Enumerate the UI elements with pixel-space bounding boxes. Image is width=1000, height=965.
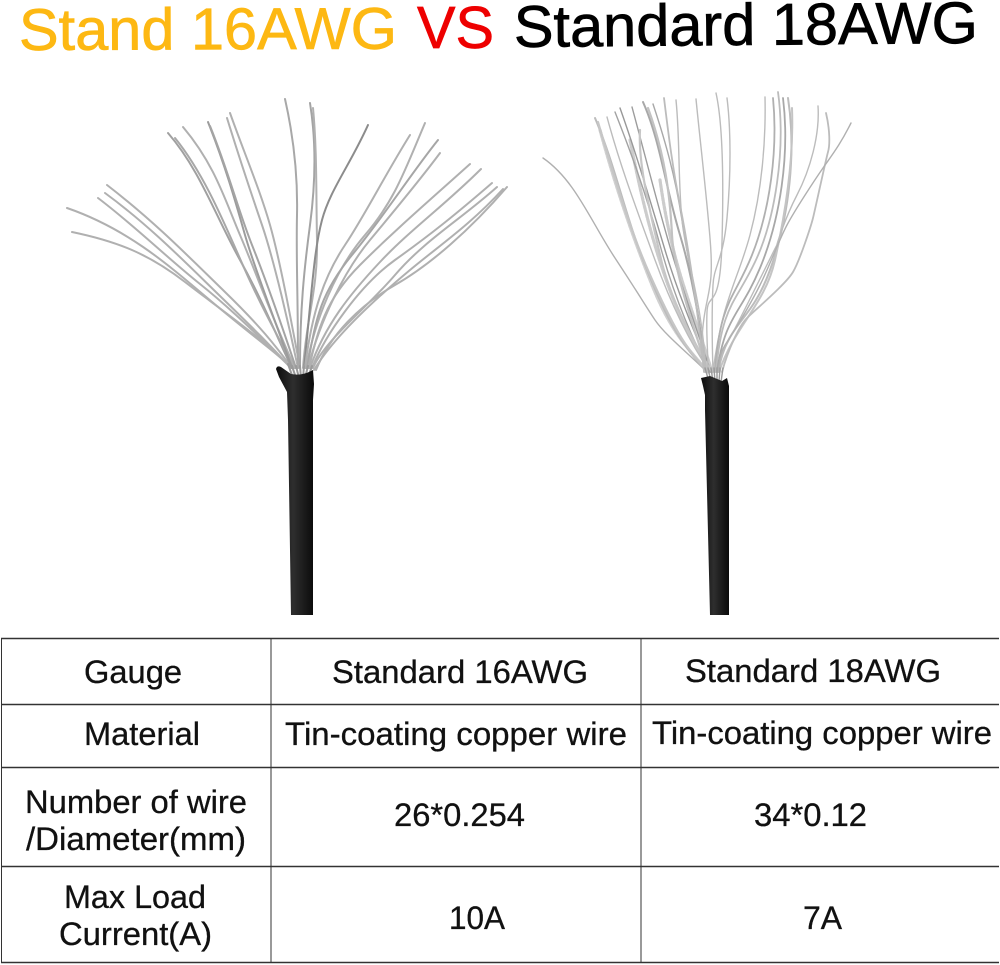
16AWG wire photo illustration: [67, 99, 507, 615]
row: number of wire and diameter: [25, 784, 867, 857]
16AWG stripped strands: [67, 99, 507, 378]
row: max load current: 10A: [449, 900, 506, 936]
row: gauge: Gauge: [84, 654, 182, 690]
row: gauge: Standard 18AWG: [685, 653, 941, 689]
row: number of wire and diameter: Number of wire: [25, 784, 247, 820]
18AWG stripped strands: [543, 92, 851, 382]
row: material: Material: [84, 716, 200, 752]
row: material: [84, 715, 992, 752]
row: material: Tin-coating copper wire: [285, 716, 627, 752]
table grid: [1, 638, 999, 963]
row: gauge: [84, 653, 941, 690]
comparison table: [1, 638, 999, 963]
title: [19, 0, 978, 63]
row: max load current: Max Load: [64, 879, 206, 915]
row: gauge: Standard 16AWG: [332, 654, 588, 690]
row: max load current: Current(A): [59, 916, 212, 952]
row: material: Tin-coating copper wire: [652, 715, 992, 751]
18AWG wire photo illustration: [543, 92, 851, 615]
row: number of wire and diameter: 26*0.254: [394, 797, 525, 833]
18AWG black cable: [701, 376, 729, 615]
row: max load current: [59, 879, 843, 952]
16AWG black cable: [276, 366, 314, 615]
row: number of wire and diameter: /Diameter(mm): [26, 821, 246, 857]
row: number of wire and diameter: 34*0.12: [754, 797, 867, 833]
row: max load current: 7A: [803, 900, 843, 936]
